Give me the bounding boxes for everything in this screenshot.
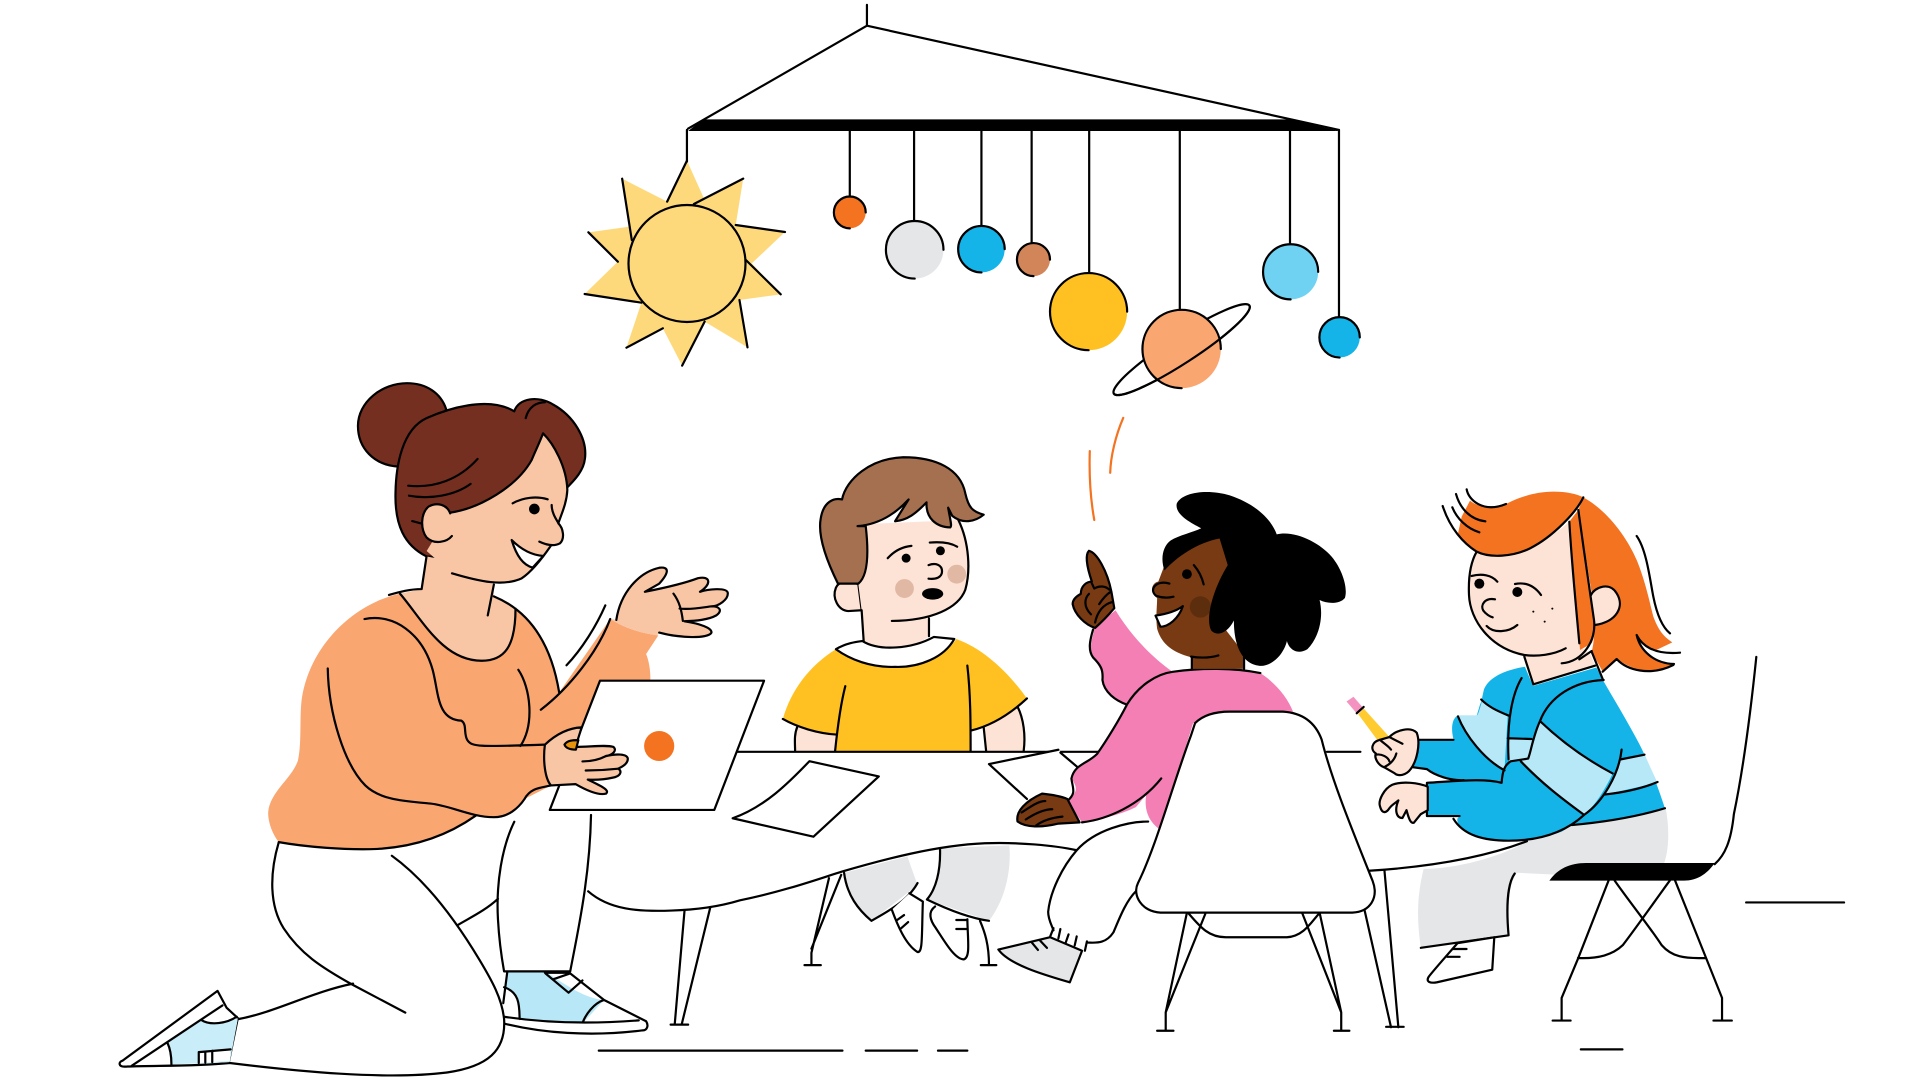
figure: redhead child head bbox=[1443, 489, 1680, 684]
figure: teacher bbox=[120, 383, 764, 1075]
hand details bbox=[582, 756, 618, 770]
girl hair bbox=[1162, 492, 1346, 666]
planet: uranus bbox=[1263, 244, 1318, 299]
raised hand outline bbox=[616, 568, 728, 637]
teacher face bbox=[427, 433, 567, 583]
shoe laces bbox=[1447, 949, 1467, 957]
teacher sweater bbox=[268, 594, 658, 849]
teacher lower hand bbox=[544, 727, 628, 794]
table bbox=[588, 750, 1527, 1025]
floor dashes bbox=[599, 902, 1844, 1051]
white chair base bbox=[1157, 913, 1349, 1031]
girl shoe bbox=[998, 937, 1082, 982]
redhead shoe bbox=[1428, 937, 1494, 983]
planet: venus bbox=[886, 221, 943, 279]
teacher neck and chest bbox=[400, 556, 516, 661]
front hair bbox=[1458, 492, 1583, 556]
side lock bbox=[1569, 510, 1595, 650]
solar system mobile bbox=[687, 5, 1360, 405]
teacher body outlines bbox=[279, 402, 610, 849]
hair tail gap bbox=[1637, 635, 1680, 664]
planet: mercury bbox=[834, 197, 866, 228]
figure: redhead child pants bbox=[1418, 808, 1715, 983]
girl facial features bbox=[1153, 565, 1244, 669]
jaw bbox=[862, 520, 968, 641]
planet: jupiter bbox=[1050, 273, 1127, 350]
table top fill bbox=[588, 752, 1527, 911]
boy facial features bbox=[888, 542, 966, 600]
teacher back shoe bbox=[120, 991, 239, 1067]
neck bbox=[862, 610, 930, 648]
table right legs bbox=[1364, 871, 1404, 1027]
arm outlines bbox=[795, 707, 1024, 751]
icon: sun rays bbox=[585, 161, 785, 366]
pants outline bbox=[1421, 874, 1515, 948]
planet: earth bbox=[958, 226, 1005, 272]
shirt lines bbox=[783, 666, 1027, 751]
teacher hair bbox=[395, 399, 585, 561]
face features bbox=[1472, 575, 1553, 631]
white collar bbox=[836, 637, 954, 667]
planet: mars bbox=[1017, 243, 1050, 276]
girl face bbox=[1152, 532, 1244, 669]
paper sheet right bbox=[989, 750, 1087, 801]
mobile hanger bbox=[687, 5, 1339, 318]
raised sleeve bbox=[1091, 610, 1173, 705]
teacher ear bbox=[422, 504, 452, 542]
shoe laces bbox=[1032, 941, 1047, 950]
upper hand fingers bbox=[1376, 737, 1402, 767]
teeth bbox=[512, 540, 543, 568]
boy face bbox=[858, 520, 969, 621]
tablet orange dot bbox=[644, 731, 674, 761]
back table legs bbox=[804, 875, 996, 965]
yellow shirt bbox=[783, 639, 1027, 751]
blue sweater bbox=[1413, 667, 1665, 840]
chair: redhead child's chair legs and back bbox=[1553, 657, 1756, 1021]
sweater lines bbox=[1413, 678, 1665, 841]
girl leg bbox=[1048, 822, 1148, 943]
teacher trousers bbox=[230, 815, 591, 1075]
teacher hair bun bbox=[358, 383, 446, 467]
light blue stripes bbox=[1458, 701, 1658, 815]
teacher raised hand bbox=[610, 568, 728, 637]
girl lower hand bbox=[1017, 794, 1080, 826]
head and neck bbox=[1469, 522, 1595, 684]
raised finger lines bbox=[1085, 582, 1112, 623]
paper sheet left bbox=[733, 761, 879, 837]
ear bbox=[1591, 586, 1620, 625]
trouser cuff bbox=[1050, 928, 1087, 951]
finger lines bbox=[1022, 801, 1062, 826]
upper hand bbox=[1372, 729, 1418, 775]
pink sweater bbox=[1067, 669, 1293, 830]
lower hand bbox=[1380, 783, 1428, 823]
chair seat bbox=[1549, 863, 1715, 881]
icon: sun disc bbox=[628, 205, 746, 322]
boy ear bbox=[835, 581, 862, 611]
thumb highlight bbox=[564, 740, 578, 750]
figure: redhead child body bbox=[1347, 667, 1665, 841]
boy legs under table bbox=[844, 845, 1010, 959]
table edges bbox=[588, 752, 1527, 911]
face outline bbox=[450, 433, 567, 583]
hair and head lines bbox=[1443, 489, 1680, 684]
figure: girl with raised finger bbox=[998, 418, 1375, 1031]
motion lines bbox=[1090, 418, 1123, 520]
girl raised hand bbox=[1073, 551, 1114, 628]
planet: neptune bbox=[1319, 317, 1360, 358]
boy hair bbox=[820, 457, 984, 584]
teacher eye bbox=[529, 504, 540, 514]
pencil bbox=[1347, 697, 1390, 740]
tablet bbox=[550, 681, 764, 810]
teacher front shoe bbox=[503, 971, 647, 1034]
boy arms bbox=[795, 707, 1024, 751]
white chair shell bbox=[1136, 712, 1375, 913]
table legs bbox=[671, 908, 710, 1025]
planet: saturn bbox=[1107, 294, 1257, 405]
sweater lines bbox=[1067, 630, 1260, 822]
back hair bbox=[1578, 497, 1673, 672]
face fill bbox=[427, 433, 567, 583]
figure: boy in yellow shirt bbox=[783, 457, 1027, 965]
